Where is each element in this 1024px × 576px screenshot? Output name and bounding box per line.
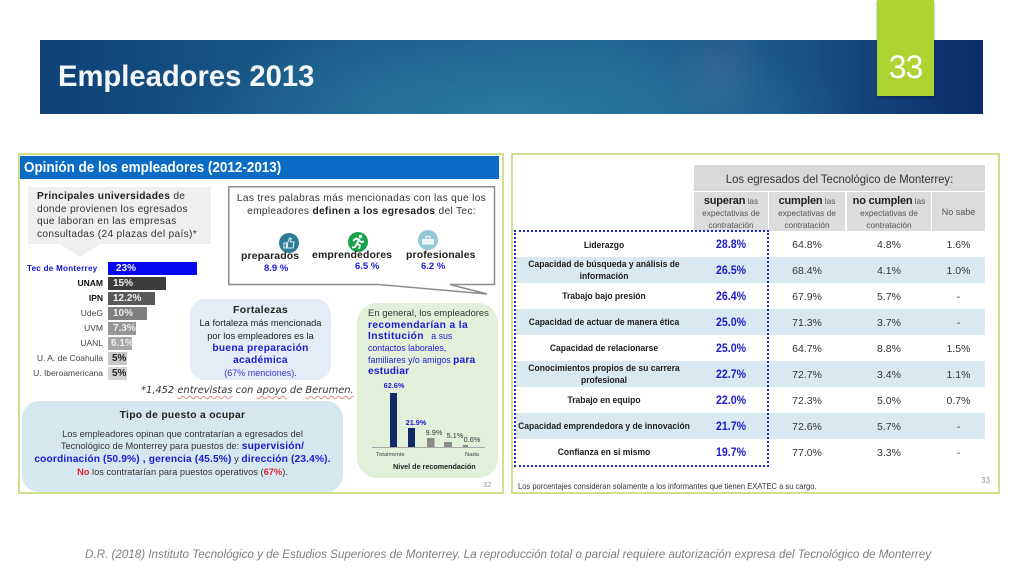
page number: 33	[889, 49, 922, 85]
word: preparados: 8.9 %	[264, 263, 288, 274]
slide number 33: 33	[981, 476, 990, 485]
table rows: 5.0%	[877, 395, 901, 407]
callout: principales universidades: que laboran en las empresas	[37, 216, 176, 227]
table rows: 67.9%	[792, 291, 822, 303]
slide number 32: 32	[483, 480, 491, 489]
table rows: Trabajo en equipo	[567, 395, 641, 406]
callout: recomendacion	[357, 303, 498, 478]
table rows: Liderazgo	[584, 240, 624, 250]
table rows: 72.6%	[792, 421, 822, 433]
callout: principales universidades: consultadas (24 plazas del país)*	[37, 228, 197, 240]
table rows: Confianza en si mismo	[558, 447, 650, 458]
callout: fortalezas: La fortaleza más mencionada	[200, 318, 321, 328]
callout: recomendacion: contactos laborales,	[368, 343, 446, 353]
callout: principales universidades: donde provienen los egresados	[37, 204, 188, 214]
page number tab	[877, 0, 934, 96]
callout: fortalezas	[190, 299, 331, 380]
footer credit: D.R. (2018) Instituto Tecnológico y de Estudios Superiores de Monterrey. La reproducción total o parcial requiere autorización expresa del Tecnológico de Monterrey	[85, 548, 931, 561]
table rows: 3.3%	[877, 447, 901, 459]
table rows: 3.7%	[877, 317, 901, 329]
bar chart: universidades: 23%	[116, 263, 136, 274]
table rows: 19.7%	[716, 447, 746, 459]
bar chart: universidades: U. A. de Coahuila	[37, 353, 103, 363]
table rows: 3.4%	[877, 369, 901, 381]
callout: fortalezas: buena preparación	[212, 343, 309, 354]
title banner	[40, 40, 983, 114]
callout: tipo de puesto	[22, 401, 343, 492]
header: title	[694, 165, 985, 191]
table rows: -	[957, 447, 960, 459]
bar chart: universidades: 6.1%	[111, 338, 134, 349]
chart: nivel de recomendacion: 21.9%	[406, 418, 427, 427]
table rows: profesional	[581, 375, 627, 386]
table rows: 25.0%	[716, 343, 746, 355]
callout: tres palabras: Las tres palabras más mencionadas con las que los	[237, 192, 486, 204]
header: superan: contratación	[708, 220, 754, 230]
callout: tipo de puesto: No los contratarían para puestos operativos (67%).	[77, 467, 288, 477]
table rows: 5.7%	[877, 421, 901, 433]
header: no cumplen	[847, 192, 931, 231]
table rows: 21.7%	[716, 421, 746, 433]
bar chart: universidades: UdeG	[81, 308, 103, 318]
panel heading	[20, 156, 499, 179]
header: cumplen: contratación	[784, 220, 830, 230]
highlight: dotted box	[514, 230, 769, 467]
header: no cumplen: contratación	[866, 220, 912, 230]
table footnote: Los porcentajes consideran solamente a los informantes que tienen EXATEC a su cargo.	[518, 481, 817, 491]
callout: tipo de puesto: Tecnológico de Monterrey para puestos de: supervisión/	[61, 441, 304, 452]
table rows: Capacidad de actuar de manera ética	[529, 317, 679, 328]
chart: nivel de recomendacion: 9.9%	[426, 428, 443, 437]
word: profesionales: 6.2 %	[421, 261, 445, 272]
panel: expectativas de contratacion	[511, 153, 1000, 494]
table header	[694, 165, 985, 231]
word: emprendedores: emprendedores	[312, 249, 392, 261]
table rows: 22.7%	[716, 369, 746, 381]
table rows: Capacidad de relacionarse	[550, 343, 658, 354]
chart: nivel de recomendacion: Totalmente	[376, 452, 406, 458]
chart: nivel de recomendacion: Nivel de recomendación	[393, 462, 476, 471]
table rows: 22.0%	[716, 395, 746, 407]
bar chart: universidades: Tec de Monterrey	[27, 264, 97, 273]
table rows: 28.8%	[716, 239, 746, 251]
table rows: -	[957, 317, 960, 329]
table rows: información	[580, 271, 628, 282]
table rows: 1.6%	[947, 239, 970, 251]
header: no cumplen: no cumplen las	[853, 195, 925, 207]
word: preparados: preparados	[241, 250, 299, 262]
table rows: 72.7%	[792, 369, 822, 381]
header: title: Los egresados del Tecnológico de Monterrey:	[726, 172, 953, 186]
chart: nivel de recomendacion: 0.6%	[464, 435, 481, 444]
table rows: 64.7%	[792, 343, 822, 355]
callout: recomendacion: Institución a sus	[368, 331, 452, 342]
table rows: 1.5%	[947, 343, 970, 355]
table rows: Trabajo bajo presión	[562, 291, 646, 302]
header: cumplen	[769, 192, 845, 231]
callout: tipo de puesto: coordinación (50.9%) , gerencia (45.5%) y dirección (23.4%).	[34, 454, 331, 465]
callout: tres palabras: empleadores definen a los egresados del Tec:	[247, 206, 476, 217]
bar chart: universidades: U. Iberoamericana	[33, 368, 103, 378]
callout: fortalezas: por los empleadores es la	[207, 331, 314, 341]
word: preparados	[241, 250, 299, 274]
word: emprendedores	[312, 249, 392, 272]
table rows: 64.8%	[792, 239, 822, 251]
table rows: Capacidad emprendedora y de innovación	[518, 421, 690, 432]
header: cumplen: cumplen las	[779, 195, 835, 207]
callout: tipo de puesto: Tipo de puesto a ocupar	[120, 410, 245, 421]
bar chart: universidades: 5%	[112, 353, 126, 364]
bar chart: universidades: 15%	[113, 278, 133, 289]
bar chart: universidades: 7.3%	[113, 323, 136, 334]
table rows: 5.7%	[877, 291, 901, 303]
callout: recomendacion: recomendarían a la	[368, 320, 468, 331]
header: no sabe	[932, 192, 985, 231]
icon: briefcase	[418, 230, 438, 250]
callout: recomendacion: estudiar	[368, 366, 409, 377]
title text: Empleadores 2013	[58, 61, 314, 93]
bar chart: universidades: 12.2%	[113, 293, 141, 304]
callout: fortalezas: académica	[233, 355, 288, 366]
note: entrevistas: *1,452 entrevistas con apoyo de Berumen.	[141, 385, 354, 396]
panel: opinion de los empleadores	[18, 153, 504, 494]
bar chart: universidades: UNAM	[78, 278, 103, 288]
table rows: 25.0%	[716, 317, 746, 329]
icon: thumb up	[279, 233, 299, 253]
table rows: 72.3%	[792, 395, 822, 407]
table rows: 0.7%	[947, 395, 970, 407]
table rows: 26.4%	[716, 291, 746, 303]
table rows: 71.3%	[792, 317, 822, 329]
callout: principales universidades	[28, 187, 211, 257]
header: no cumplen: expectativas de	[860, 208, 918, 218]
callout: recomendacion: familiares y/o amigos para	[368, 355, 475, 366]
bar chart: universidades: IPN	[89, 293, 103, 303]
header: no sabe: No sabe	[942, 207, 975, 217]
table rows: 4.1%	[877, 265, 901, 277]
callout: fortalezas: Fortalezas	[233, 304, 288, 316]
bar chart: universidades: 10%	[113, 308, 133, 319]
callout: tipo de puesto: Los empleadores opinan que contratarían a egresados del	[62, 429, 303, 439]
table rows: 1.0%	[947, 265, 970, 277]
callout: principales universidades: Principales universidades de	[37, 191, 185, 202]
bar chart: universidades: UANL	[80, 338, 103, 348]
table rows: -	[957, 421, 960, 433]
callout: tres palabras	[228, 186, 496, 295]
table rows: -	[957, 291, 960, 303]
table rows: 8.8%	[877, 343, 901, 355]
word: profesionales: profesionales	[406, 249, 476, 261]
bar chart: universidades: 5%	[112, 368, 126, 379]
word: profesionales	[406, 249, 476, 272]
header: cumplen: expectativas de	[778, 208, 836, 218]
table rows: 4.8%	[877, 239, 901, 251]
callout: recomendacion: En general, los empleadores	[368, 308, 489, 319]
bar chart: universidades: UVM	[84, 323, 103, 333]
table rows: 1.1%	[947, 369, 970, 381]
icon: runner	[348, 232, 368, 252]
chart: nivel de recomendacion: Nada	[465, 452, 480, 458]
chart: nivel de recomendacion: 5.1%	[447, 431, 464, 440]
chart: nivel de recomendacion	[372, 381, 485, 471]
header: superan: superan las	[704, 195, 758, 207]
chart: nivel de recomendacion: 62.6%	[384, 381, 405, 390]
bar chart: universidades	[27, 262, 197, 380]
table rows: Capacidad de búsqueda y análisis de	[528, 259, 680, 270]
header: superan: expectativas de	[702, 208, 760, 218]
table rows: Conocimientos propios de su carrera	[528, 363, 680, 374]
table rows: 77.0%	[792, 447, 822, 459]
panel heading: Opinión de los empleadores (2012-2013)	[24, 160, 281, 176]
callout: fortalezas: (67% menciones).	[224, 368, 297, 378]
header: superan	[694, 192, 768, 231]
table rows: 26.5%	[716, 265, 746, 277]
word: emprendedores: 6.5 %	[355, 261, 379, 272]
table rows: 68.4%	[792, 265, 822, 277]
